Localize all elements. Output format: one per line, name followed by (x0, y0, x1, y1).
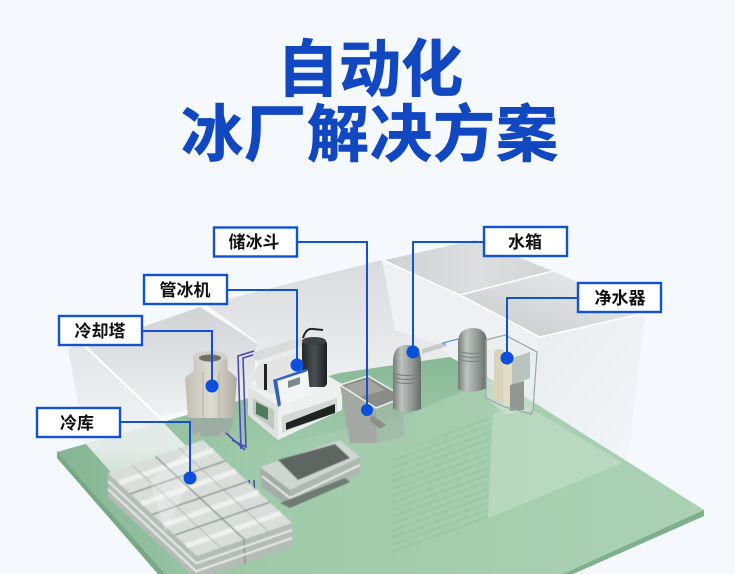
callout: 储冰斗 (214, 228, 373, 416)
cooling tower (185, 351, 237, 438)
callout: 储冰斗: 储冰斗 (228, 233, 280, 252)
callout: 冷却塔: 冷却塔 (74, 321, 126, 341)
ice hopper (340, 376, 404, 443)
callout: 管冰机: 管冰机 (160, 280, 210, 300)
pipes (226, 351, 256, 500)
water tanks (393, 328, 487, 412)
title: 自动化 (277, 36, 463, 105)
callout: 净水器: 净水器 (594, 289, 646, 308)
callout: 水箱 (406, 227, 567, 358)
callout: 管冰机 (144, 275, 304, 372)
callout: 净水器 (500, 283, 661, 364)
ice block pallets: left (108, 440, 292, 574)
water purifier (486, 335, 537, 414)
tube ice machine (248, 329, 342, 440)
back walls (85, 240, 645, 462)
ice block pallet: centre (260, 440, 360, 508)
title (181, 36, 559, 170)
callout: 冷库 (37, 408, 196, 484)
callout: 冷库: 冷库 (60, 413, 94, 433)
callout: 水箱: 水箱 (508, 233, 542, 252)
title: 冰厂解决方案 (181, 101, 559, 170)
translucent left wall (68, 345, 190, 533)
callout: 冷却塔 (59, 316, 218, 392)
floor (57, 357, 704, 574)
